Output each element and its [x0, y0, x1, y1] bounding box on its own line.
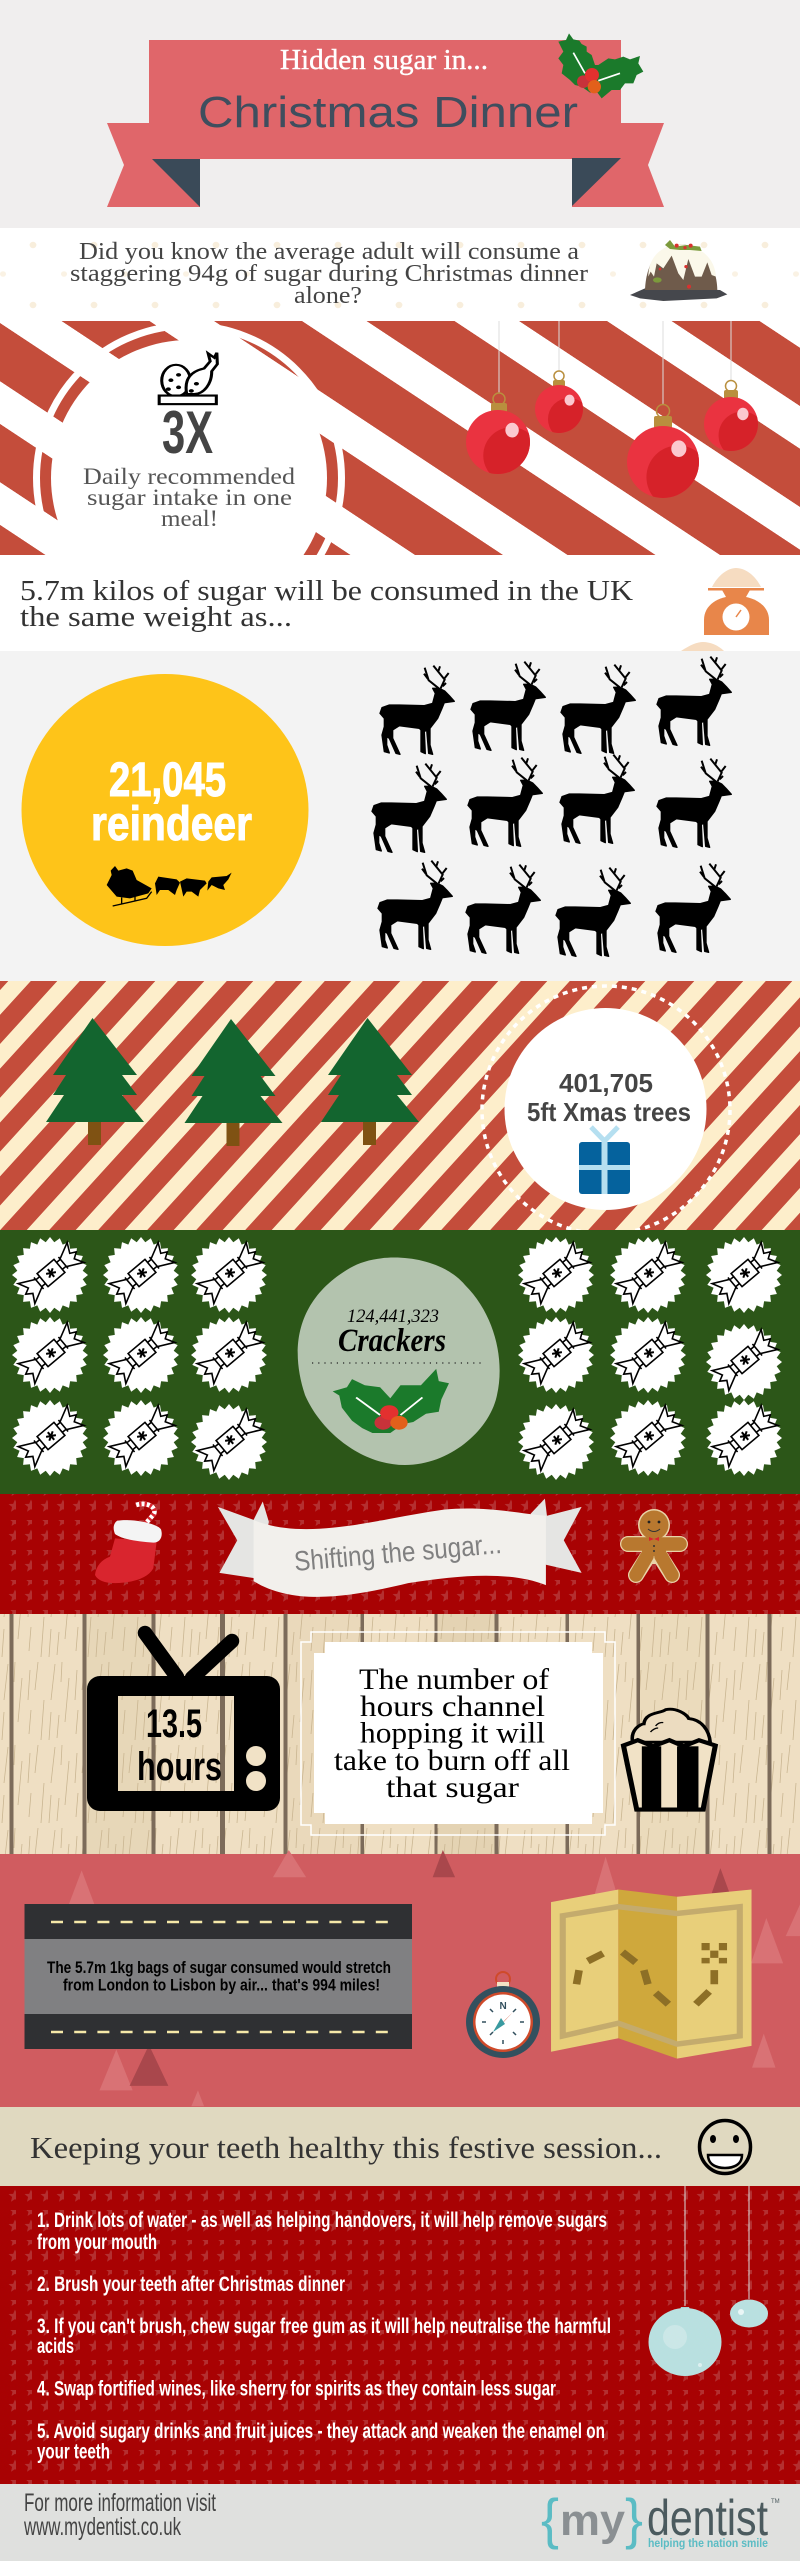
- footer text: For more information visit: [24, 2489, 216, 2517]
- panel: title header: [0, 0, 800, 228]
- stat: 21,045 reindeer: reindeer: [91, 798, 252, 851]
- road graphic: from London to Lisbon by air... that's 994 miles!: [63, 1976, 380, 1994]
- cracker badges right: [518, 1237, 782, 1480]
- stat: 21,045 reindeer: [91, 754, 252, 851]
- logo: mydentist: }: [625, 2487, 643, 2550]
- stat caption: Daily recommended: [83, 464, 296, 489]
- footer text: [23, 2489, 216, 2541]
- text card: take to burn off all: [334, 1744, 570, 1777]
- icon: roast turkey: [159, 353, 217, 404]
- icon: compass: N: [500, 2001, 507, 2012]
- panel: shifting the sugar band: [0, 1494, 800, 1614]
- stat circle: [22, 674, 308, 946]
- circle ring: [36, 326, 342, 630]
- stat caption: sugar intake in one: [87, 485, 292, 510]
- panel: 3X daily intake on stripes: [0, 321, 800, 630]
- logo: mydentist: dentist: [647, 2490, 768, 2546]
- icon: weighing scale: [681, 568, 769, 651]
- stat: 401,705 trees: 5ft Xmas trees: [527, 1097, 691, 1127]
- icon: tree 1: [46, 1018, 144, 1145]
- stat: crackers: Crackers: [338, 1323, 446, 1359]
- tips list: 5. Avoid sugary drinks and fruit juices - they attack and weaken the enamel on: [37, 2420, 605, 2443]
- stat: 3X: 3X: [162, 399, 213, 466]
- intro text: alone?: [294, 283, 362, 309]
- ribbon banner: [218, 1499, 582, 1597]
- stat circle: [504, 1008, 706, 1210]
- icon: christmas pudding: [630, 240, 727, 301]
- icon: stocking: [95, 1504, 162, 1583]
- heading text: Keeping your teeth healthy this festive session...: [30, 2130, 662, 2165]
- logo: mydentist: [541, 2487, 780, 2550]
- panel: tips: [0, 2186, 800, 2484]
- tips list: your teeth: [37, 2440, 110, 2464]
- panel: intro: [0, 228, 800, 321]
- logo: mydentist: {: [541, 2487, 559, 2550]
- icon: bauble 4: [704, 321, 766, 459]
- panel: wood channel hopping: [0, 1614, 800, 1854]
- logo: mydentist: my: [560, 2496, 626, 2545]
- stat blob: [298, 1258, 500, 1465]
- stat: 21,045 reindeer: 21,045: [109, 754, 226, 807]
- title line: Christmas Dinner: Christmas Dinner: [198, 88, 578, 137]
- logo: mydentist: helping the nation smile: [648, 2536, 768, 2550]
- stat: 13.5 hours: hours: [137, 1745, 222, 1789]
- panel: teeth heading: [0, 2107, 800, 2186]
- heading text: the same weight as...: [20, 601, 292, 633]
- icon: tree 3: [321, 1018, 419, 1145]
- panel: sugar weight heading: [0, 555, 800, 651]
- stat: 401,705 trees: [527, 1068, 691, 1127]
- icon: gingerbread man: [628, 1509, 680, 1575]
- text card: that sugar: [386, 1771, 519, 1804]
- tips list: 4. Swap fortified wines, like sherry for spirits as they contain less sugar: [37, 2378, 556, 2400]
- icon: compass: [466, 1972, 540, 2058]
- icon: bauble 1: [466, 321, 540, 484]
- dotted ring: [482, 986, 730, 1234]
- tips list: from your mouth: [37, 2231, 157, 2254]
- text card: The number of: [359, 1663, 549, 1696]
- stat: crackers: 124,441,323: [347, 1306, 439, 1327]
- icon: tree 2: [184, 1019, 282, 1146]
- stat caption: meal!: [161, 506, 218, 531]
- stat caption: [83, 464, 296, 531]
- heading text: [20, 575, 633, 633]
- icon: holly: [558, 33, 643, 98]
- logo: mydentist: TM: [771, 2499, 780, 2505]
- panel: road to Lisbon: [0, 1850, 800, 2107]
- icon: smiley: [700, 2120, 750, 2174]
- panel: christmas trees: [0, 981, 800, 1234]
- tips list: [37, 2209, 611, 2464]
- icon: gift: [579, 1127, 630, 1194]
- intro text: [70, 239, 588, 309]
- banner text: Shifting the sugar...: [293, 1528, 503, 1577]
- stat: crackers: [338, 1306, 446, 1359]
- intro text: Did you know the average adult will consume a: [79, 239, 579, 265]
- panel: footer: [0, 2484, 800, 2561]
- stat: 13.5 hours: [137, 1702, 222, 1789]
- reindeer silhouettes: [372, 657, 731, 956]
- icon: blue bauble large: [648, 2186, 722, 2376]
- heading text: 5.7m kilos of sugar will be consumed in the UK: [20, 575, 633, 607]
- stat: 13.5 hours: 13.5: [146, 1702, 202, 1746]
- road graphic: The 5.7m 1kg bags of sugar consumed would stretch: [47, 1958, 391, 1977]
- icon: popcorn: [623, 1709, 715, 1810]
- icon: bauble 3: [627, 321, 710, 509]
- title ribbon: [107, 40, 664, 207]
- icon: holly: [333, 1369, 449, 1433]
- icon: television: [87, 1633, 280, 1811]
- footer text: www.mydentist.co.uk: [23, 2513, 181, 2541]
- intro text: staggering 94g of sugar during Christmas dinner: [70, 261, 588, 287]
- cracker badges left: [12, 1237, 267, 1480]
- title line: Hidden sugar in: Hidden sugar in...: [280, 44, 488, 76]
- text card: hopping it will: [360, 1716, 545, 1750]
- tips list: 2. Brush your teeth after Christmas dinner: [37, 2273, 345, 2296]
- icon: santa sleigh: [107, 866, 232, 906]
- tips list: 3. If you can't brush, chew sugar free gum as it will help neutralise the harmful: [37, 2315, 611, 2338]
- tips list: acids: [37, 2335, 74, 2358]
- tips list: 1. Drink lots of water - as well as helping handovers, it will help remove sugars: [37, 2209, 607, 2232]
- text card: hours channel: [360, 1690, 545, 1723]
- background triangles: [69, 1850, 800, 2106]
- road graphic: [24, 1904, 412, 2049]
- icon: treasure map: [551, 1889, 752, 2059]
- panel: crackers: [0, 1230, 800, 1494]
- stat: 401,705 trees: 401,705: [559, 1068, 653, 1098]
- icon: bauble 2: [535, 321, 590, 440]
- text card: [301, 1632, 615, 1835]
- icon: blue bauble small: [730, 2186, 768, 2328]
- panel: reindeer: [0, 651, 800, 981]
